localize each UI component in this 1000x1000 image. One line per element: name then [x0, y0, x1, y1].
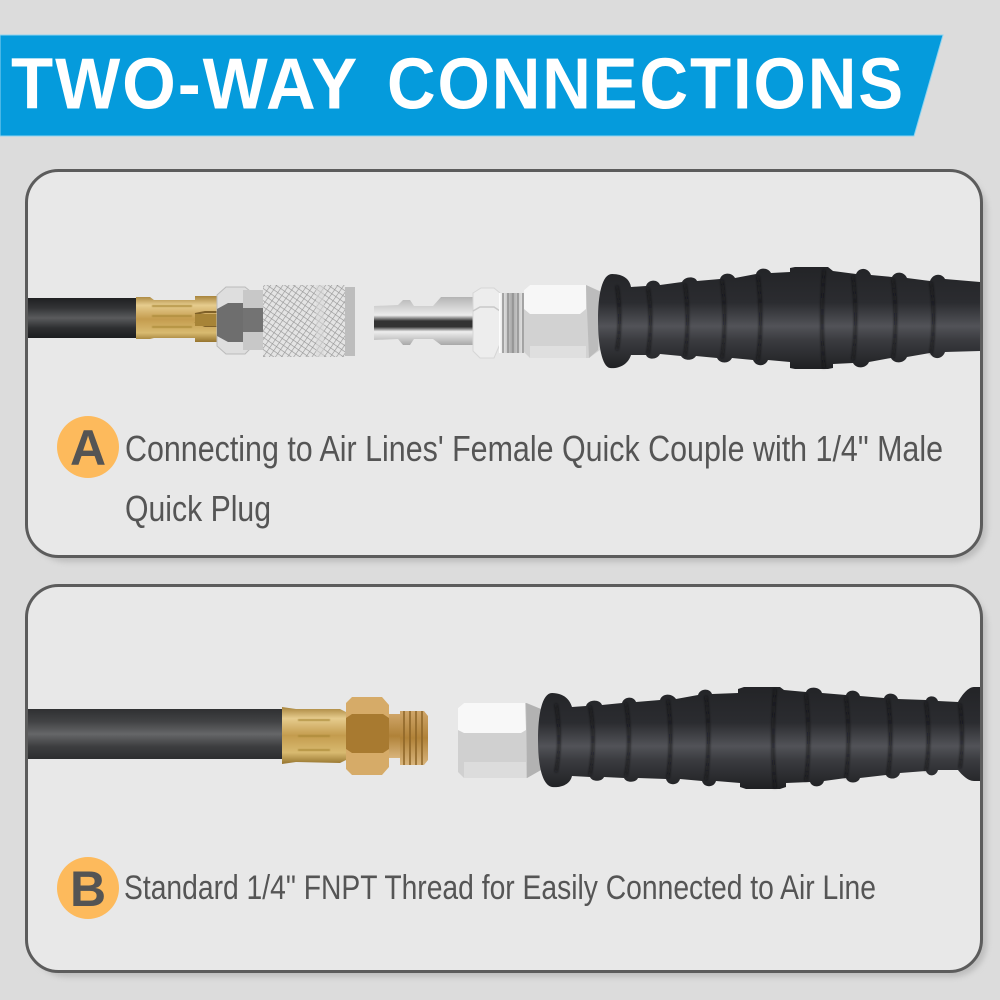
hose and female quick coupler [28, 285, 355, 357]
rubber strain relief grip [598, 267, 980, 369]
title banner [0, 35, 943, 136]
silver female nut [458, 703, 541, 778]
panel: connection B [26, 586, 987, 977]
badge B: B [70, 861, 106, 917]
badge A [57, 416, 119, 478]
text A line 2: Quick Plug [125, 488, 271, 529]
badge B [57, 857, 119, 919]
panel: connection A [26, 170, 987, 562]
title: CONNECTIONS [387, 44, 905, 124]
male quick plug [374, 285, 602, 358]
hose and brass male fitting [28, 697, 428, 775]
title: TWO-WAY [11, 44, 358, 124]
badge A: A [70, 420, 106, 476]
rubber grip, right end flange [538, 687, 980, 789]
